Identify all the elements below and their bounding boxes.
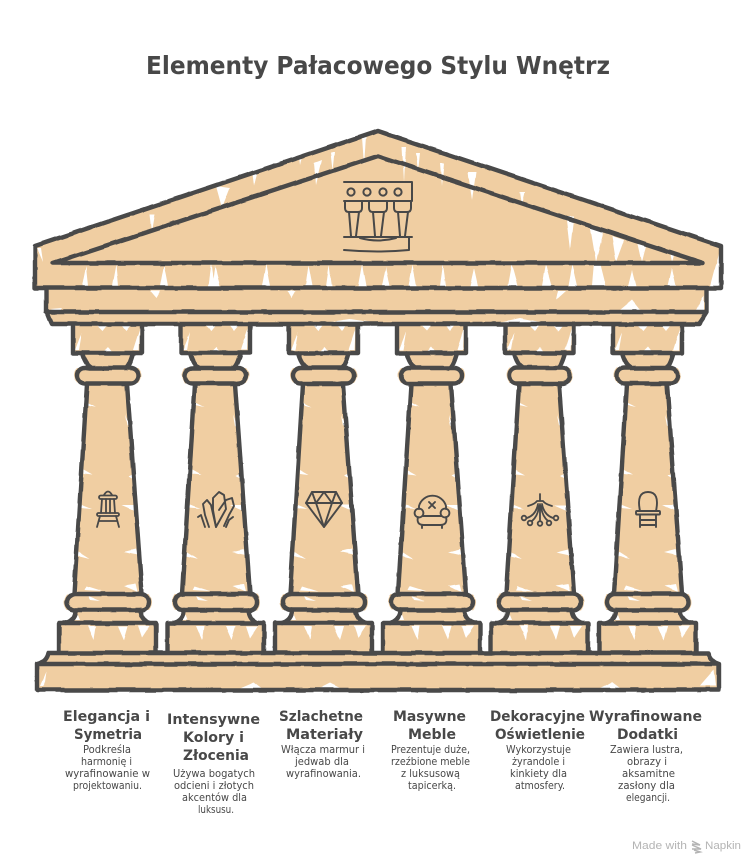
icon: crystals (198, 492, 234, 527)
label: Elegancja i Symetria: harmonię i (81, 756, 132, 768)
label: Masywne Meble: tapicerką. (408, 780, 456, 792)
icon: armchair (415, 496, 449, 528)
icon: chandelier (522, 494, 558, 526)
label: Masywne Meble: rzeźbione meble (391, 756, 470, 768)
icon: diamond (306, 492, 342, 527)
label: Intensywne Kolory i Złocenia (167, 712, 260, 816)
label: Wyrafinowane Dodatki: obrazy i (627, 756, 667, 768)
label: Wyrafinowane Dodatki: aksamitne (622, 768, 675, 780)
temple illustration (35, 131, 721, 690)
watermark: Made with Napkin: Made with (632, 840, 687, 852)
label: Elegancja i Symetria: wyrafinowanie w (65, 768, 150, 780)
label: Dekoracyjne Oświetlenie: żyrandole i (512, 756, 565, 768)
label: Dekoracyjne Oświetlenie: Oświetlenie (495, 727, 585, 743)
icon: chair (97, 492, 119, 527)
label: Szlachetne Materiały: jedwab dla (294, 756, 349, 768)
label: Intensywne Kolory i Złocenia: odcieni i złotych (174, 780, 254, 792)
watermark: Made with Napkin (632, 840, 741, 853)
label: Intensywne Kolory i Złocenia: Intensywne (167, 712, 260, 728)
label: Dekoracyjne Oświetlenie: kinkiety dla (510, 768, 567, 780)
label: Intensywne Kolory i Złocenia: luksusu. (198, 804, 234, 816)
label: Szlachetne Materiały: Szlachetne (279, 709, 363, 725)
roof pediment (35, 131, 721, 288)
label: Dekoracyjne Oświetlenie: Dekoracyjne (490, 709, 585, 725)
label: Intensywne Kolory i Złocenia: Złocenia (183, 748, 249, 764)
label: Masywne Meble: Prezentuje duże, (391, 744, 470, 756)
temple base (37, 653, 719, 690)
label: Elegancja i Symetria: Elegancja i (63, 709, 150, 725)
label: Wyrafinowane Dodatki: Dodatki (617, 727, 678, 743)
title: Elementy Pałacowego Stylu Wnętrz (146, 51, 610, 80)
entablature (46, 288, 707, 324)
label: Intensywne Kolory i Złocenia: Używa bogatych (173, 768, 255, 780)
column 4 (383, 324, 480, 653)
label: Szlachetne Materiały: Materiały (286, 727, 363, 743)
roof texture (37, 137, 720, 288)
icon: mirror (636, 492, 660, 527)
label: Dekoracyjne Oświetlenie: Wykorzystuje (506, 744, 571, 756)
label: Intensywne Kolory i Złocenia: akcentów dla (182, 792, 247, 804)
column 6 (599, 324, 696, 653)
label: Masywne Meble: z luksusową (401, 768, 460, 780)
icon: palace columns (344, 182, 412, 252)
label: Szlachetne Materiały: Włącza marmur i (281, 744, 365, 756)
label: Dekoracyjne Oświetlenie (490, 709, 585, 792)
label: Elegancja i Symetria: Podkreśla (83, 744, 131, 756)
column 1 (59, 324, 156, 653)
label: Wyrafinowane Dodatki (589, 709, 702, 804)
label: Masywne Meble: Masywne (393, 709, 466, 725)
label: Elegancja i Symetria: Symetria (74, 727, 142, 743)
label: Szlachetne Materiały: wyrafinowania. (286, 768, 361, 780)
label: Wyrafinowane Dodatki: elegancji. (626, 792, 670, 804)
label: Intensywne Kolory i Złocenia: Kolory i (183, 730, 244, 746)
label: Wyrafinowane Dodatki: Wyrafinowane (589, 709, 702, 725)
label: Wyrafinowane Dodatki: Zawiera lustra, (610, 744, 683, 756)
label: Elegancja i Symetria: projektowaniu. (73, 780, 142, 792)
column 3 (275, 324, 372, 653)
label: Wyrafinowane Dodatki: zasłony dla (618, 780, 675, 792)
label: Masywne Meble: Meble (408, 727, 456, 743)
column 5 (491, 324, 588, 653)
label: Elegancja i Symetria (63, 709, 150, 792)
label: Dekoracyjne Oświetlenie: atmosfery. (515, 780, 565, 792)
watermark: Made with Napkin: Napkin (705, 840, 741, 852)
column 2 (167, 324, 264, 653)
label: Szlachetne Materiały (279, 709, 365, 780)
label: Masywne Meble (391, 709, 470, 792)
